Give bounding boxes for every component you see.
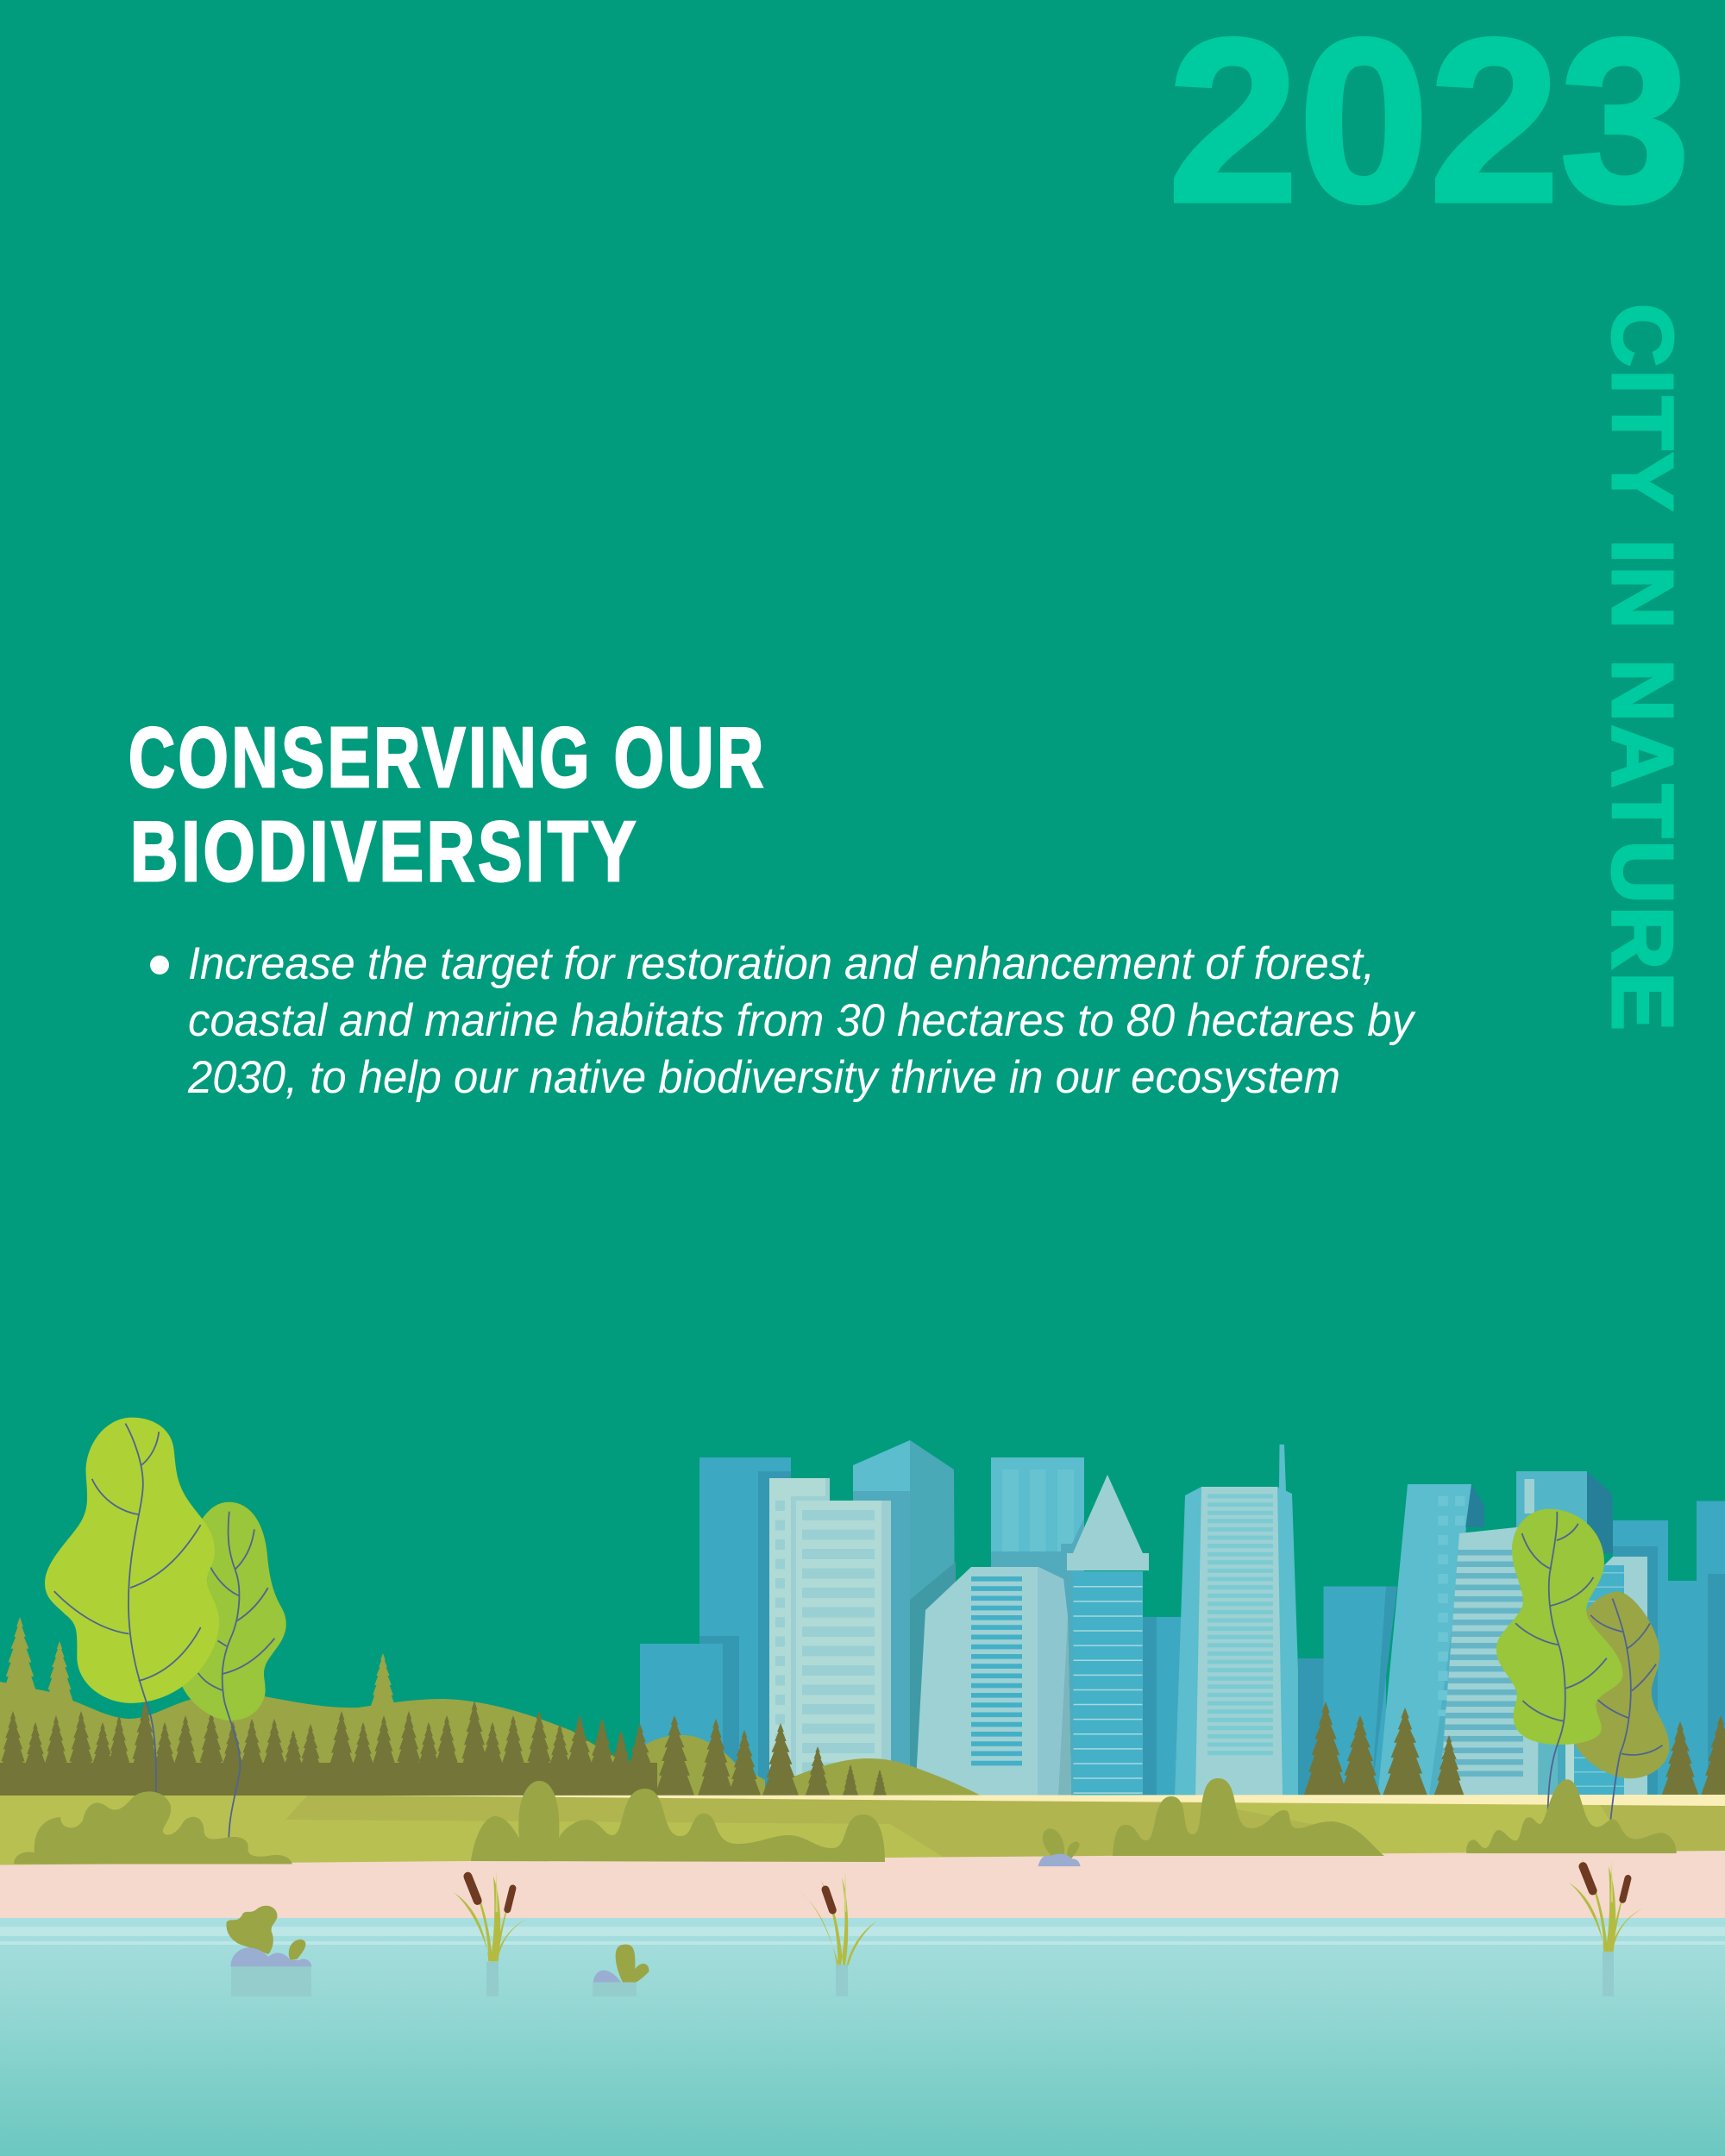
bush: centre left [471, 1781, 885, 1862]
bullet point text: 2030, to help our native biodiversity thrive in our ecosystem [187, 1052, 1340, 1103]
building: rear right teal tower [1516, 1471, 1614, 1796]
bush: far left [14, 1791, 292, 1864]
pine forest [0, 1701, 1725, 1796]
bush: centre right [1113, 1778, 1384, 1856]
sand strip [0, 1851, 1725, 1920]
small plant on sand [1038, 1828, 1081, 1866]
building: tall blue block [699, 1457, 791, 1796]
building: pale wide block [915, 1567, 1071, 1796]
reeds: centre [800, 1869, 877, 1996]
building: spire tower [1175, 1445, 1302, 1796]
heading: CONSERVING OUR [129, 710, 767, 805]
bush: far right [1466, 1779, 1677, 1853]
bullet point text [150, 938, 1416, 1103]
bullet point text: Increase the target for restoration and enhancement of forest, [188, 938, 1375, 989]
city skyline [640, 1440, 1725, 1796]
grass bank [0, 1795, 1725, 1865]
water [0, 1918, 1725, 2156]
tree: left front [45, 1418, 219, 1793]
back hill with light pines [0, 1617, 656, 1796]
reeds: left [454, 1869, 527, 1996]
building: pale rear tower [769, 1478, 830, 1796]
building: far right blue blocks [1613, 1501, 1725, 1796]
front hills [630, 1735, 981, 1796]
building: cone tower [1067, 1475, 1149, 1796]
building: low blue block [640, 1644, 723, 1796]
building: behind cone tower [1143, 1617, 1182, 1796]
reeds: right [1569, 1858, 1642, 1996]
heading [129, 710, 767, 899]
building: rear teal block [991, 1457, 1084, 1796]
tree: right rear [1568, 1591, 1669, 1820]
vertical label: city in nature: CITY IN NATURE [1594, 304, 1690, 1033]
building: angled teal tower [853, 1440, 956, 1796]
building: slanted teal tower [1378, 1484, 1484, 1796]
pond plant: left [226, 1906, 311, 1996]
building: pale front tower [796, 1501, 891, 1796]
heading: BIODIVERSITY [130, 804, 639, 899]
bullet point text: coastal and marine habitats from 30 hectares to 80 hectares by [188, 995, 1416, 1046]
tree: right front [1496, 1509, 1623, 1816]
building: pale striped block [1440, 1527, 1565, 1796]
pond plant: centre [593, 1945, 649, 1996]
tree: left rear [180, 1502, 286, 1840]
building: pale framed block [1565, 1557, 1658, 1796]
building: mid blue block [1298, 1587, 1397, 1796]
